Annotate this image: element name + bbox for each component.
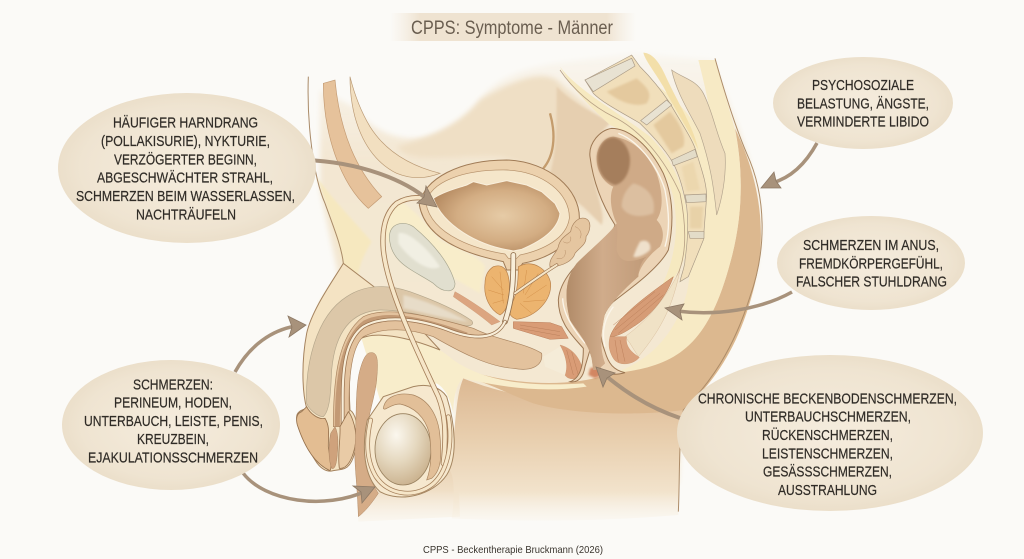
title: CPPS: Symptome - Männer xyxy=(411,18,614,39)
text: pain locations: SCHMERZEN: xyxy=(133,377,213,393)
soft skin wash xyxy=(320,53,760,483)
panel: urinary symptoms xyxy=(58,93,316,243)
rectum xyxy=(558,128,672,382)
text: chronic pain: CHRONISCHE BECKENBODENSCHMERZEN, xyxy=(698,391,957,407)
outer wall xyxy=(419,160,579,270)
text: chronic pain: GESÄSSSCHMERZEN, xyxy=(763,464,892,481)
front cream wedge xyxy=(317,177,372,310)
peritoneum line xyxy=(560,70,685,277)
text: anal symptoms xyxy=(796,238,947,291)
text: urinary symptoms: VERZÖGERTER BEGINN, xyxy=(114,150,257,168)
footer credit: CPPS - Beckentherapie Bruckmann (2026) xyxy=(423,544,603,556)
text: urinary symptoms: SCHMERZEN BEIM WASSERLASSEN, xyxy=(76,189,295,205)
panel: chronic pain xyxy=(677,355,983,511)
text: pain locations xyxy=(84,377,263,466)
title xyxy=(390,13,636,41)
yellow band by rectum xyxy=(560,67,688,290)
lower cream region xyxy=(360,331,587,413)
brown upper end xyxy=(597,137,630,185)
corpus cavernosum xyxy=(306,287,473,417)
text: urinary symptoms: (POLLAKISURIE), NYKTURIE, xyxy=(101,134,270,150)
anatomy illustration xyxy=(297,53,762,522)
text: chronic pain xyxy=(698,391,957,499)
arrow: pelvic floor pain to perineum xyxy=(596,367,680,418)
text: urinary symptoms: NACHTRÄUFELN xyxy=(136,206,236,223)
arrow: pain to testis xyxy=(243,473,375,503)
back tan band xyxy=(463,128,761,413)
prostate xyxy=(485,264,551,319)
vas deferens loop xyxy=(383,198,445,463)
arrow: pain to penis xyxy=(235,316,306,372)
vertebra shading xyxy=(607,78,649,105)
highlight xyxy=(633,241,650,257)
panel: anal symptoms xyxy=(777,216,965,310)
pale fibres xyxy=(543,347,566,375)
levator fibres xyxy=(625,270,680,357)
text: urinary symptoms: ABGESCHWÄCHTER STRAHL, xyxy=(97,170,273,187)
lower body tan wash xyxy=(447,378,683,521)
tan behind rectum top xyxy=(550,87,610,225)
under-scrotum wash xyxy=(355,443,460,522)
penile urethra xyxy=(343,319,505,427)
pelvic floor muscles xyxy=(453,270,680,379)
inner wall xyxy=(426,170,569,258)
seminal vesicles xyxy=(550,218,590,267)
front muscles xyxy=(513,322,568,339)
text: pain locations: UNTERBAUCH, LEISTE, PENIS, xyxy=(84,414,263,430)
discs xyxy=(585,58,635,92)
scrotum and testis xyxy=(364,385,454,497)
panel: pain locations xyxy=(62,360,280,490)
text: anal symptoms: FALSCHER STUHLDRANG xyxy=(796,275,947,291)
inner tan wash xyxy=(397,76,610,220)
glans xyxy=(297,407,331,471)
urachus xyxy=(543,113,553,168)
corpus spongiosum xyxy=(333,312,542,427)
front outline xyxy=(308,77,343,263)
text: pain locations: KREUZBEIN, xyxy=(137,432,209,448)
text: urinary symptoms: HÄUFIGER HARNDRANG xyxy=(113,115,258,132)
sacrum xyxy=(585,55,707,282)
text: chronic pain: UNTERBAUCHSCHMERZEN, xyxy=(745,410,911,426)
text: psychosocial: VERMINDERTE LIBIDO xyxy=(797,115,929,131)
abdominal curve xyxy=(350,77,440,178)
back outline xyxy=(678,58,762,512)
penis xyxy=(297,263,542,471)
text: anal symptoms: FREMDKÖRPERGEFÜHL, xyxy=(799,254,943,272)
lower rectum shading xyxy=(567,225,647,370)
external sphincter xyxy=(609,337,639,364)
arrow: anal pain to rectum xyxy=(665,292,792,320)
arrow: psychosocial to body xyxy=(761,143,817,188)
scrotal sac xyxy=(364,385,454,497)
text: chronic pain: RÜCKENSCHMERZEN, xyxy=(762,426,893,444)
anterior pink band xyxy=(453,292,500,325)
text: pain locations: EJAKULATIONSSCHMERZEN xyxy=(88,450,258,466)
arrow: urinary symptoms to bladder xyxy=(305,160,437,207)
rectal wall xyxy=(558,128,672,382)
rectus muscle band xyxy=(323,80,382,208)
bladder xyxy=(419,160,579,270)
levator muscle xyxy=(610,277,673,337)
text: chronic pain: LEISTENSCHMERZEN, xyxy=(762,446,893,462)
outer skin xyxy=(297,263,440,471)
spinal canal xyxy=(672,70,725,215)
ejaculatory duct xyxy=(515,265,557,293)
scrotal rim xyxy=(368,417,450,493)
dark spongiosum band xyxy=(337,318,467,427)
lumen xyxy=(433,181,560,251)
panel: psychosocial xyxy=(773,57,953,149)
text: psychosocial: PSYCHOSOZIALE xyxy=(812,78,914,94)
text: urinary symptoms xyxy=(76,115,295,223)
bladder neck and urethra to prostate xyxy=(505,255,513,322)
yellow fat band xyxy=(613,60,741,373)
spine xyxy=(585,53,725,282)
pubic bone xyxy=(389,223,455,291)
text: psychosocial: BELASTUNG, ÄNGSTE, xyxy=(797,95,929,112)
white wall highlight xyxy=(563,133,669,347)
text: anal symptoms: SCHMERZEN IM ANUS, xyxy=(803,238,939,254)
shaft behind scrotum xyxy=(355,353,378,517)
testis xyxy=(375,414,431,485)
rectal lumen xyxy=(567,137,663,370)
yellow streak xyxy=(643,53,698,150)
epididymis xyxy=(383,394,441,480)
pubic surround cream xyxy=(385,200,485,293)
text: pain locations: PERINEUM, HODEN, xyxy=(114,396,232,412)
text: psychosocial xyxy=(797,78,929,131)
anal tissue xyxy=(588,365,610,378)
text: chronic pain: AUSSTRAHLUNG xyxy=(778,483,877,499)
